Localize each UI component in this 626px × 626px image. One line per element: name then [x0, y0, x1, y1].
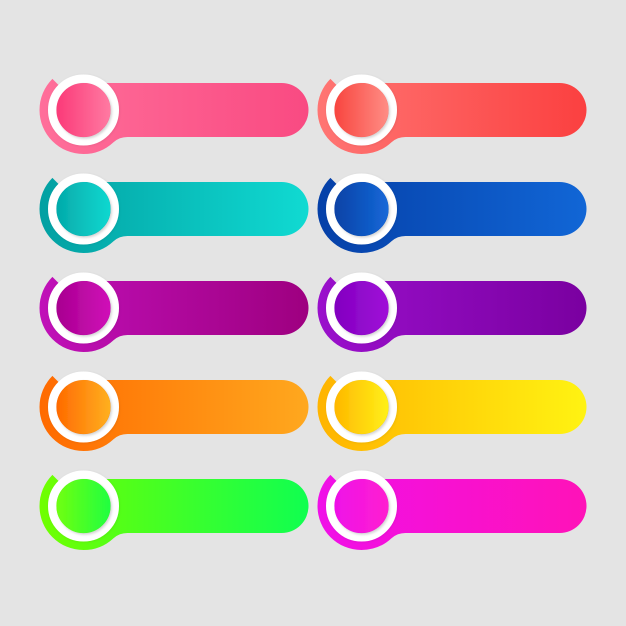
banner bar: hot pink — [318, 475, 586, 550]
button: pink — [40, 79, 308, 154]
button: orange — [40, 376, 308, 451]
icon circle: coral — [334, 83, 388, 137]
banner bar: orange — [40, 376, 308, 451]
white ring: yellow — [330, 376, 393, 438]
icon circle: teal — [56, 182, 110, 236]
banner bar: blue — [318, 178, 586, 253]
banner bar: yellow — [318, 376, 586, 451]
white ring: orange — [52, 376, 115, 438]
icon circle: pink — [56, 83, 110, 137]
button: magenta — [40, 277, 308, 352]
icon circle: blue — [334, 182, 388, 236]
icon circle: magenta — [56, 281, 110, 335]
banner bar: teal — [40, 178, 308, 253]
banner bar: green — [40, 475, 308, 550]
icon circle: green — [56, 479, 110, 533]
button: purple — [318, 277, 586, 352]
button: yellow — [318, 376, 586, 451]
button: blue — [318, 178, 586, 253]
white ring: teal — [52, 178, 115, 240]
icon circle: hot pink — [334, 479, 388, 533]
banner bar: coral — [318, 79, 586, 154]
white ring: green — [52, 475, 115, 537]
white ring: magenta — [52, 277, 115, 339]
button: green — [40, 475, 308, 550]
white ring: blue — [330, 178, 393, 240]
icon circle: orange — [56, 380, 110, 434]
banner bar: pink — [40, 79, 308, 154]
white ring: hot pink — [330, 475, 393, 537]
icon circle: purple — [334, 281, 388, 335]
white ring: coral — [330, 79, 393, 141]
white ring: pink — [52, 79, 115, 141]
banner bar: purple — [318, 277, 586, 352]
button: teal — [40, 178, 308, 253]
white ring: purple — [330, 277, 393, 339]
banner bar: magenta — [40, 277, 308, 352]
button: hot pink — [318, 475, 586, 550]
button: coral — [318, 79, 586, 154]
icon circle: yellow — [334, 380, 388, 434]
